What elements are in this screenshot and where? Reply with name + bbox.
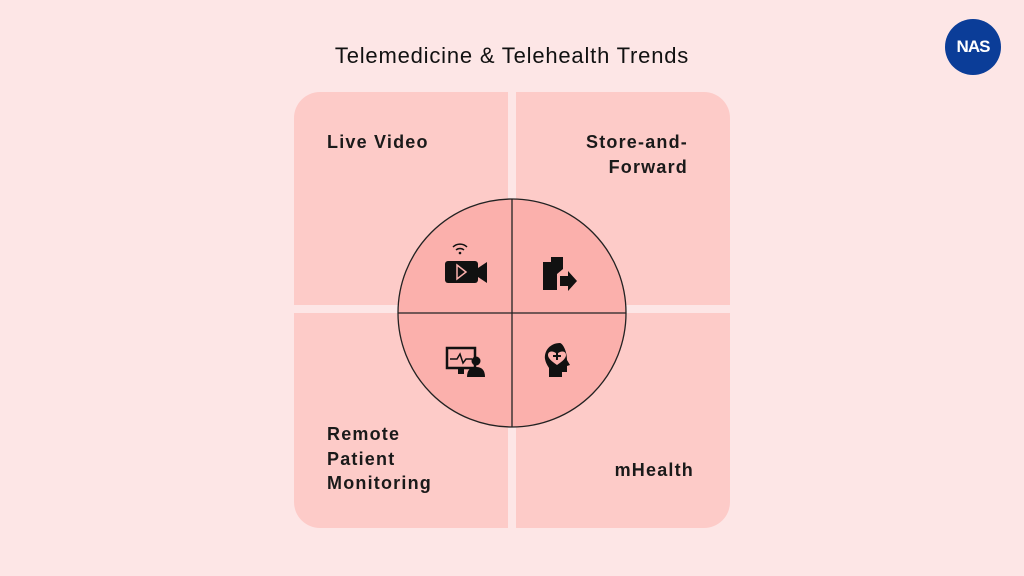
label: store-and-forward: Forward [609,156,688,176]
label: remote patient monitoring: Patient [327,448,395,468]
label: live video: Live Video [327,132,429,152]
logo: NAS [957,37,989,56]
label: remote patient monitoring: Remote [327,424,400,444]
panel: mhealth [516,313,730,528]
panel: remote patient monitoring [294,313,508,528]
icon: store and forward [543,257,577,291]
panel: live video [294,92,508,305]
icon: mental health head [545,343,570,377]
panel: store-and-forward [516,92,730,305]
label: store-and-forward: Store-and- [586,132,688,152]
icon: remote monitoring [447,348,485,377]
logo [945,19,1001,75]
icon: video camera [445,244,487,283]
label: store-and-forward [586,132,688,176]
label: remote patient monitoring: Monitoring [327,473,432,493]
title: Telemedicine & Telehealth Trends [335,43,689,68]
label: remote patient monitoring [327,424,432,493]
label: mhealth: mHealth [615,460,694,480]
